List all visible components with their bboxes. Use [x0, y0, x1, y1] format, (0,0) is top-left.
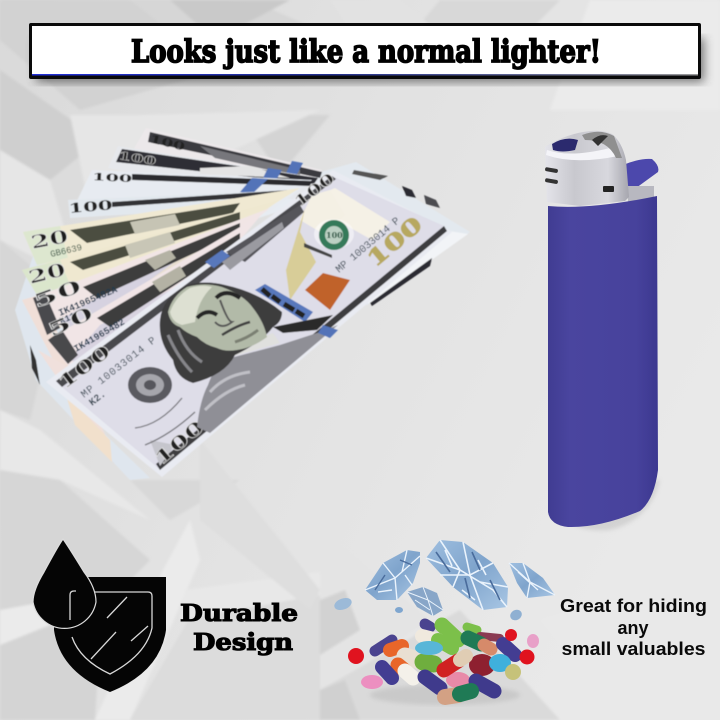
bill: 50 second: [44, 214, 262, 368]
bill: 20 top: [23, 188, 300, 265]
portrait: face: [168, 284, 267, 351]
cash fan: [15, 128, 470, 480]
bill: 100 fourth: 100: [68, 198, 113, 217]
label: durable design: [180, 600, 298, 656]
blue ribbon: [255, 284, 313, 322]
lighter shadow: [552, 480, 660, 530]
diamonds: [333, 540, 555, 622]
blue patch: [318, 325, 338, 338]
shadow under pills: [370, 685, 520, 705]
bill: 50 top: IK41965482A: [57, 284, 119, 319]
bill: 100 second: [108, 146, 320, 200]
title text: Looks just like a normal lighter!: [131, 34, 601, 70]
bill: 20 top: GB6639: [49, 243, 83, 260]
durable design icon: [33, 539, 166, 692]
portrait: dark neck tie: [273, 315, 333, 333]
label: great for hiding: any: [617, 618, 649, 638]
corner 100 bottom: 100: [151, 416, 209, 470]
portrait: coat: [197, 325, 338, 433]
lighter head: [545, 131, 629, 206]
bill: 100 top: [132, 128, 322, 190]
label: durable design: Design: [193, 629, 293, 656]
bill: 50 second: IK41965482: [72, 316, 127, 355]
bill: 50 top: [31, 208, 270, 335]
serial number right: MP 10033014 P: [334, 215, 403, 276]
corner 100 left: 100: [54, 341, 115, 394]
bill: main 100: [46, 169, 452, 477]
watermark panel: [312, 188, 390, 240]
bill: 50 second: 50: [44, 303, 97, 342]
green seal: [314, 219, 354, 249]
bill: 100 third: [70, 170, 312, 215]
small diamond: [407, 587, 443, 616]
bill: main 100: K2.: [88, 389, 109, 409]
corner 100 top right: 100: [291, 169, 338, 211]
orange patch: [305, 273, 350, 310]
pink edge below fan: [38, 350, 85, 382]
right diamond: [509, 563, 555, 598]
black seal: [128, 367, 172, 403]
portrait: hair: [160, 282, 282, 383]
bill: 20 top: 20: [29, 226, 70, 254]
lighter flap: [623, 159, 658, 190]
label: great for hiding: Great for hiding: [560, 596, 707, 616]
label: great for hiding: small valuables: [562, 639, 706, 659]
serial number left: MP 10033014 P: [79, 335, 159, 401]
back stack of bills: [15, 162, 470, 480]
lighter body: [548, 196, 658, 527]
shield: [54, 577, 166, 692]
bill: 20 second: [22, 200, 280, 295]
signature block: [226, 205, 304, 262]
left diamond: [365, 550, 420, 600]
title banner: [29, 23, 704, 82]
label: great for hiding: [560, 596, 707, 659]
bill: 100 top: 100: [148, 132, 187, 154]
bill: 50 top: K11: [58, 311, 78, 327]
signatures: [135, 398, 195, 445]
bill: 100 second: 100: [118, 149, 158, 168]
lighter: [545, 131, 660, 530]
tiny diamonds: [333, 596, 524, 622]
bill: 100 fourth: [68, 190, 296, 218]
bill: 20 second: 20: [26, 259, 68, 289]
large diamond: [426, 540, 508, 610]
water drop: [33, 539, 96, 628]
pills: [348, 624, 539, 705]
bill: 50 top: 50: [31, 276, 85, 313]
label: durable design: Durable: [180, 600, 298, 627]
bill: main 100: 100: [326, 230, 343, 240]
bill: 100 third: 100: [92, 172, 132, 185]
gold 100: 100: [362, 212, 428, 273]
